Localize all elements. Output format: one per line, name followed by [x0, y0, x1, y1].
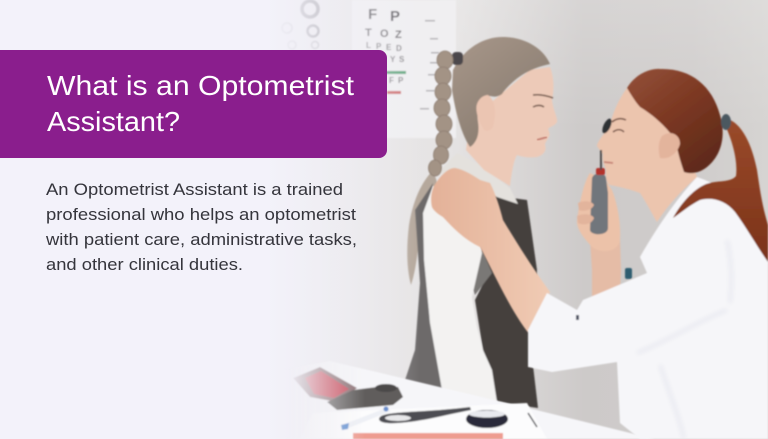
cuff button: [576, 315, 579, 320]
girl braid: [428, 51, 453, 176]
dark pen on desk: [528, 413, 537, 427]
girl lips: [537, 137, 547, 140]
optometrist lips: [604, 162, 613, 163]
tablet screen: [305, 371, 349, 398]
description text: An Optometrist Assistant is a trained: [46, 181, 343, 199]
pen tip: [341, 423, 349, 430]
forceps: [379, 407, 471, 423]
coat shading: [637, 240, 731, 439]
title: What is an Optometrist: [47, 70, 354, 101]
optometrist ponytail: [673, 118, 768, 262]
optometrist hand on shoulder and forearm: [431, 168, 550, 335]
photo: eye chart: E: [386, 43, 392, 52]
description text: with patient care, administrative tasks,: [45, 231, 357, 249]
grey instrument: [327, 387, 403, 410]
photo: eye chart: Y: [390, 55, 396, 64]
description text: professional who helps an optometrist: [46, 206, 356, 224]
wall top light: [440, 0, 768, 130]
left fade over photo: [0, 0, 420, 439]
optometrist hair: [627, 69, 723, 173]
photo: eye chart: P: [376, 42, 382, 51]
photo: eye chart: T: [365, 27, 372, 39]
coat detail: [625, 268, 632, 279]
title panel: [0, 50, 387, 158]
grey dress patch: [470, 250, 492, 295]
photo: eye chart: P: [390, 8, 400, 25]
description text: [45, 181, 357, 274]
title: Assistant?: [47, 106, 180, 137]
table top: [320, 366, 650, 439]
photo: eye chart: O: [380, 28, 389, 40]
ophthalmoscope: [590, 117, 614, 234]
trial lens: [466, 410, 508, 428]
photo: eye chart: D: [396, 44, 402, 53]
optometrist neck and face: [597, 80, 697, 222]
description text: and other clinical duties.: [46, 256, 243, 274]
photo: eye chart: L: [366, 41, 371, 50]
photo: eye chart: F: [368, 6, 377, 23]
girl neck and face: [466, 67, 557, 186]
girl collar: [438, 153, 518, 204]
optometrist hand: [577, 173, 620, 251]
photo: girl: [405, 37, 557, 408]
girl ear: [476, 95, 495, 131]
photo: optometrist: [431, 69, 768, 439]
girl dress: [475, 195, 538, 408]
pen clip: [384, 406, 388, 412]
photo: table and items: [294, 366, 650, 439]
girl braid tail: [407, 170, 438, 285]
optometrist raised arm: [590, 240, 621, 305]
girl sleeve: [423, 186, 497, 402]
photo: eye chart: F: [389, 76, 394, 85]
pen: [348, 410, 390, 427]
photo: eye chart: Z: [395, 29, 402, 41]
optometrist eye and brow: [612, 119, 626, 132]
paper sheet: [510, 402, 530, 410]
girl hair tie: [452, 52, 463, 65]
red tablet: [293, 367, 357, 402]
instrument dial: [375, 384, 397, 392]
photo: eye chart: S: [399, 55, 405, 64]
forceps opening: [385, 415, 411, 421]
photo: eye chart: P: [398, 76, 404, 85]
girl skirt and back of dress: [405, 183, 450, 393]
girl eye and brow: [533, 95, 553, 107]
optometrist coat: [528, 177, 768, 439]
optometrist ear: [659, 133, 680, 158]
fingers: [577, 201, 594, 224]
red chart stripe: [353, 433, 503, 439]
optometrist hair tie: [721, 114, 731, 130]
photo: eye chart: [282, 0, 456, 138]
title: [47, 70, 354, 137]
girl hair: [452, 37, 550, 147]
